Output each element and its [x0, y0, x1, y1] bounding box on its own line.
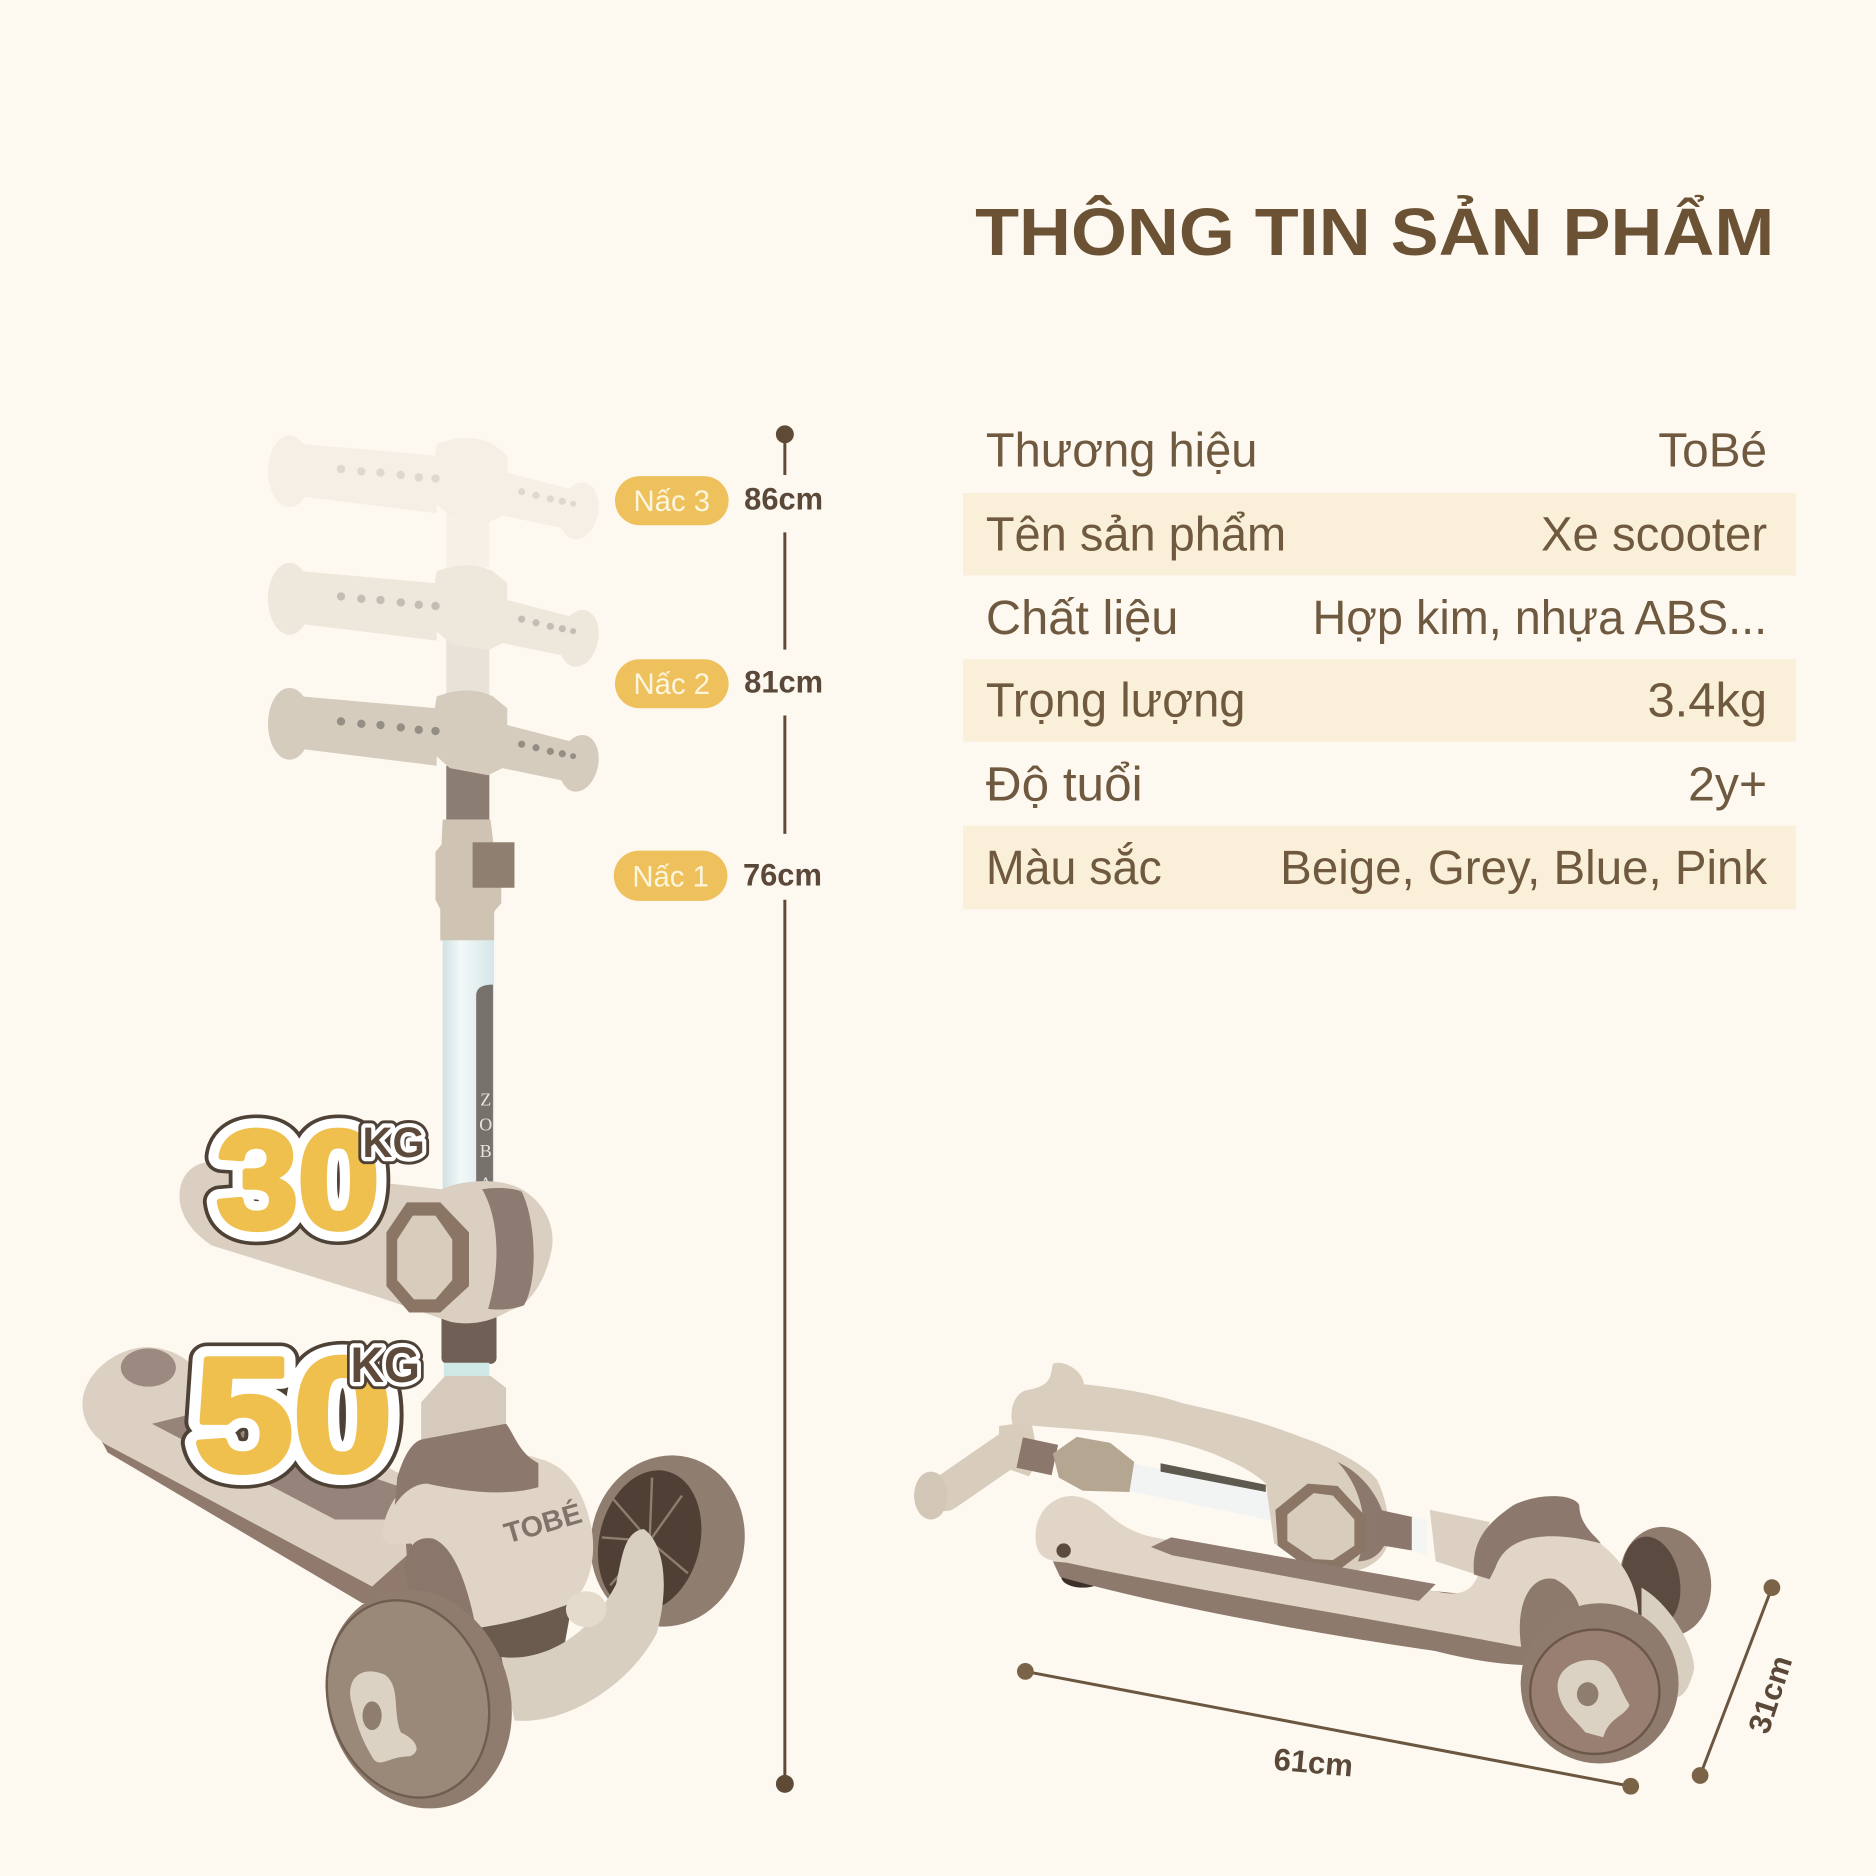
- front wheel: [1521, 1603, 1679, 1764]
- deck: [82, 1347, 407, 1586]
- dimension: length 61cm: 61cm: [1272, 1742, 1355, 1784]
- height label: level 1: [614, 851, 822, 901]
- blue tube with label strip: Z: [480, 1090, 491, 1110]
- row: colours: Màu sắc: [986, 841, 1162, 895]
- lower clamp: [1430, 1510, 1490, 1577]
- row: brand: [986, 425, 1767, 478]
- row: brand: ToBé: [1658, 425, 1767, 478]
- row bands: [963, 493, 1796, 909]
- row: age: [986, 758, 1767, 811]
- row: product name: Tên sản phẩm: [986, 508, 1286, 561]
- rear small wheel: [1061, 1566, 1104, 1588]
- row: age: Độ tuổi: [986, 758, 1143, 811]
- front wheel: [298, 1565, 540, 1833]
- handle neck: [1016, 1437, 1058, 1475]
- row: weight: 3.4kg: [1647, 675, 1767, 728]
- row: colours: Beige, Grey, Blue, Pink: [1280, 842, 1767, 895]
- badge: 30 KG: KG: [363, 1119, 425, 1167]
- badge: 50 KG: KG: [351, 1337, 420, 1393]
- title: THÔNG TIN SẢN PHẨM: [975, 195, 1774, 270]
- badge: 50 KG: KG: [351, 1337, 420, 1393]
- panel: product info table: [963, 425, 1796, 909]
- height label: level 3: 86cm: [744, 482, 823, 517]
- height label: level 1: 76cm: [743, 857, 822, 892]
- height scale line: [776, 425, 794, 1793]
- front fork arm: [1642, 1588, 1694, 1697]
- badge: 30 KG: KG: [363, 1119, 425, 1167]
- height label: level 2: 81cm: [744, 665, 823, 700]
- row: material: Chất liệu: [986, 592, 1178, 645]
- front dome: TOBÉ: [500, 1496, 586, 1550]
- blue tube with label strip: B: [480, 1141, 492, 1161]
- brown collar: [395, 1424, 538, 1505]
- handle grip: [914, 1421, 1038, 1519]
- back wheel: [1611, 1520, 1720, 1644]
- handle position 1: [268, 688, 604, 823]
- badge: 30 KG: 30: [217, 1103, 379, 1258]
- blue tube with label strip: [443, 940, 494, 1199]
- row: product name: [986, 508, 1767, 561]
- front dome: [382, 1454, 593, 1630]
- badge: 50 KG: 50: [194, 1325, 392, 1505]
- badge: 50 KG: KG: [351, 1337, 420, 1393]
- row: weight: [986, 675, 1767, 728]
- fold-down seat arm: [179, 1163, 553, 1323]
- height label: level 3: Nấc 3: [634, 485, 710, 518]
- row: material: Hợp kim, nhựa ABS...: [1312, 592, 1767, 645]
- front fork arm: [501, 1529, 664, 1721]
- dimension: width 31cm: 31cm: [1741, 1651, 1799, 1738]
- badge: 30 KG: 30: [217, 1103, 379, 1258]
- deck: [1036, 1496, 1638, 1663]
- back wheel: [572, 1439, 763, 1643]
- handle position 3: [268, 436, 604, 567]
- row: product name: Xe scooter: [1541, 508, 1767, 561]
- badge: 50 KG: 50: [194, 1325, 392, 1505]
- lower neck: [1369, 1508, 1427, 1555]
- row: weight: Trọng lượng: [986, 675, 1245, 728]
- blue tube with label strip: A: [479, 1173, 492, 1193]
- height label: level 1: Nấc 1: [632, 861, 709, 894]
- blue tube with label strip: O: [479, 1115, 492, 1135]
- height label: level 2: Nấc 2: [634, 668, 710, 701]
- dimension: width 31cm: [1692, 1579, 1799, 1784]
- brown collar: [1474, 1496, 1601, 1579]
- badge: 30 KG: 30: [217, 1103, 379, 1258]
- row: material: [986, 592, 1767, 645]
- folded scooter illustration: [914, 1363, 1720, 1764]
- upright scooter illustration: [82, 436, 763, 1833]
- badge: 50 KG: 50: [194, 1325, 392, 1505]
- white tube: [1117, 1461, 1278, 1522]
- dark gap under body: [443, 1591, 574, 1669]
- lower neck: [421, 1312, 506, 1439]
- badge: 30 KG: KG: [363, 1119, 425, 1167]
- deck underside: [86, 1412, 431, 1603]
- stem clamp: [436, 820, 514, 940]
- handle position 2: [268, 563, 604, 696]
- height label: level 3: [615, 476, 823, 525]
- upper clamp: [1053, 1437, 1134, 1492]
- deck underside: [1053, 1561, 1555, 1665]
- row: age: 2y+: [1688, 758, 1767, 811]
- row: colours: [986, 841, 1767, 895]
- fold seat arm: [1011, 1363, 1389, 1574]
- height label: level 2: [615, 659, 823, 708]
- row: brand: Thương hiệu: [986, 425, 1257, 478]
- dimension: length 61cm: [1017, 1663, 1639, 1795]
